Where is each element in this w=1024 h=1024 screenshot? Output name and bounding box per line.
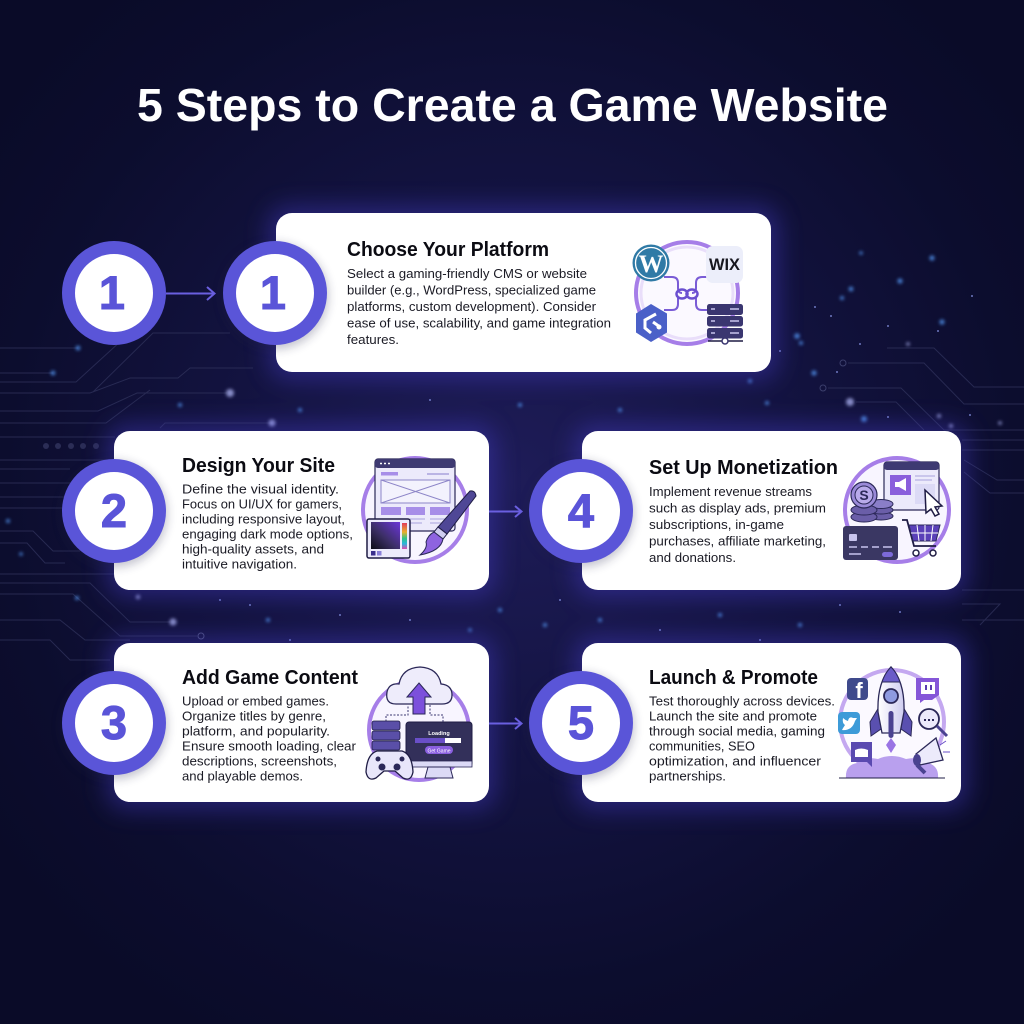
card 2 description: engaging dark mode options, — [182, 526, 353, 542]
card 1 description: features. — [347, 332, 399, 347]
card 5 description: optimization, and influencer — [649, 754, 822, 768]
card 5 description: Launch the site and promote — [649, 708, 817, 724]
card 4 heading: Set Up Monetization — [649, 457, 838, 479]
icon: megaphone — [913, 738, 950, 773]
icon: launch cloud — [846, 756, 938, 778]
card 3 description: platform, and popularity. — [182, 724, 330, 738]
card 1 heading: Choose Your Platform — [347, 239, 549, 261]
icon: colour palette — [367, 519, 410, 558]
icon: hexagon logo — [636, 304, 667, 342]
icon: Wix logo: WIX — [709, 255, 741, 274]
card 2 background — [114, 431, 489, 590]
card 5 background — [582, 643, 961, 802]
icon: design tools — [363, 458, 476, 562]
card 5 heading: Launch & Promote — [649, 667, 818, 689]
icon: monitor — [406, 722, 472, 778]
card 4 description — [649, 484, 826, 565]
card 1 description: Select a gaming-friendly CMS or website — [347, 266, 587, 281]
panel: step 3 add game content — [114, 643, 489, 802]
arrow: step 2 to step 4 — [489, 506, 522, 517]
card 3 description: Upload or embed games. — [182, 694, 329, 708]
card 5 description: through social media, gaming — [649, 724, 825, 738]
step 1 leading badge: 1 — [99, 266, 125, 319]
icon: coin stacks: S — [859, 487, 869, 503]
card 3 description: and playable demos. — [182, 768, 303, 784]
card 5 description — [649, 694, 835, 784]
icon: discord — [851, 742, 872, 767]
card 3 description: Organize titles by genre, — [182, 708, 326, 724]
step 2 badge: 2 — [101, 484, 127, 537]
step 1 leading badge — [62, 241, 166, 345]
card 3 heading: Add Game Content — [182, 667, 358, 689]
card 2 description: Focus on UI/UX for gamers, — [182, 496, 342, 512]
step 3 badge: 3 — [101, 696, 127, 749]
panel: step 4 set up monetization — [582, 431, 961, 590]
card 2 description: including responsive layout, — [182, 512, 345, 526]
step 1 badge: 1 — [260, 266, 286, 319]
icon: search — [919, 709, 947, 736]
icon: ground line — [839, 777, 945, 779]
card 4 description: subscriptions, in-game — [649, 517, 784, 532]
card 4 description: such as display ads, premium — [649, 500, 826, 516]
card 3 description: Ensure smooth loading, clear — [182, 738, 357, 754]
step 5 badge — [528, 671, 634, 779]
icon: cloud — [387, 667, 452, 714]
card 3 description: descriptions, screenshots, — [182, 754, 337, 768]
card 2 description: high-quality assets, and — [182, 542, 324, 556]
icon: shopping cart — [902, 520, 940, 556]
card 2 heading: Design Your Site — [182, 455, 335, 477]
card 2 description: Define the visual identity. — [182, 482, 339, 496]
icon: paint brush — [420, 491, 476, 555]
card 4 description: purchases, affiliate marketing, — [649, 534, 826, 548]
step 3 badge — [61, 671, 167, 779]
icon: twitter — [838, 712, 860, 734]
card 5 description: partnerships. — [649, 768, 726, 784]
icon: gamepad — [366, 751, 413, 779]
card 4 description: and donations. — [649, 550, 736, 565]
card 2 description: intuitive navigation. — [182, 556, 297, 572]
icon: launch and promote — [838, 667, 950, 778]
card 4 background — [582, 431, 961, 590]
icon: server stack — [707, 304, 743, 344]
icon: credit card — [843, 526, 898, 560]
panel: step 1 choose your platform — [276, 213, 771, 372]
step 1 badge — [222, 241, 328, 349]
icon: game server stack — [372, 721, 400, 750]
panel: step 5 launch and promote — [582, 643, 961, 802]
step 5 badge: 5 — [568, 696, 594, 749]
card 2 description — [182, 482, 353, 572]
card 1 description: platforms, custom development). Consider — [347, 299, 597, 314]
card 4 description: Implement revenue streams — [649, 484, 813, 499]
card 1 description — [347, 266, 611, 347]
step 4 badge: 4 — [568, 484, 594, 537]
card 1 description: ease of use, scalability, and game integration — [347, 316, 611, 330]
step 4 badge — [528, 459, 634, 567]
icon: game upload — [366, 667, 472, 780]
circuit lines — [0, 333, 1024, 660]
icon: monitor: Get Game — [427, 748, 451, 754]
icon: ad window — [884, 462, 942, 516]
icon: twitch — [916, 678, 939, 703]
icon: WordPress logo: W — [638, 251, 664, 278]
title: 5 Steps to Create a Game Website — [137, 79, 888, 131]
stars — [6, 251, 1002, 641]
card 3 description — [182, 694, 357, 784]
card 1 background — [276, 213, 771, 372]
card glows — [106, 206, 969, 810]
icon: wireframe window — [375, 459, 455, 531]
card 5 description: Test thoroughly across devices. — [649, 694, 835, 708]
arrow: step 3 to step 5 — [489, 718, 522, 729]
arrow: badge 1 to step 1 — [166, 287, 214, 300]
icon: platform connections — [632, 242, 743, 344]
panel: step 2 design your site — [114, 431, 489, 590]
icon: facebook: f — [855, 678, 863, 703]
icon: monetization — [843, 458, 949, 562]
card 1 description: builder (e.g., WordPress, specialized game — [347, 282, 596, 298]
card 5 description: communities, SEO — [649, 738, 755, 754]
icon: rocket — [870, 667, 912, 753]
step 2 badge — [61, 459, 167, 567]
card 3 background — [114, 643, 489, 802]
icon: monitor: Loading — [428, 731, 450, 737]
